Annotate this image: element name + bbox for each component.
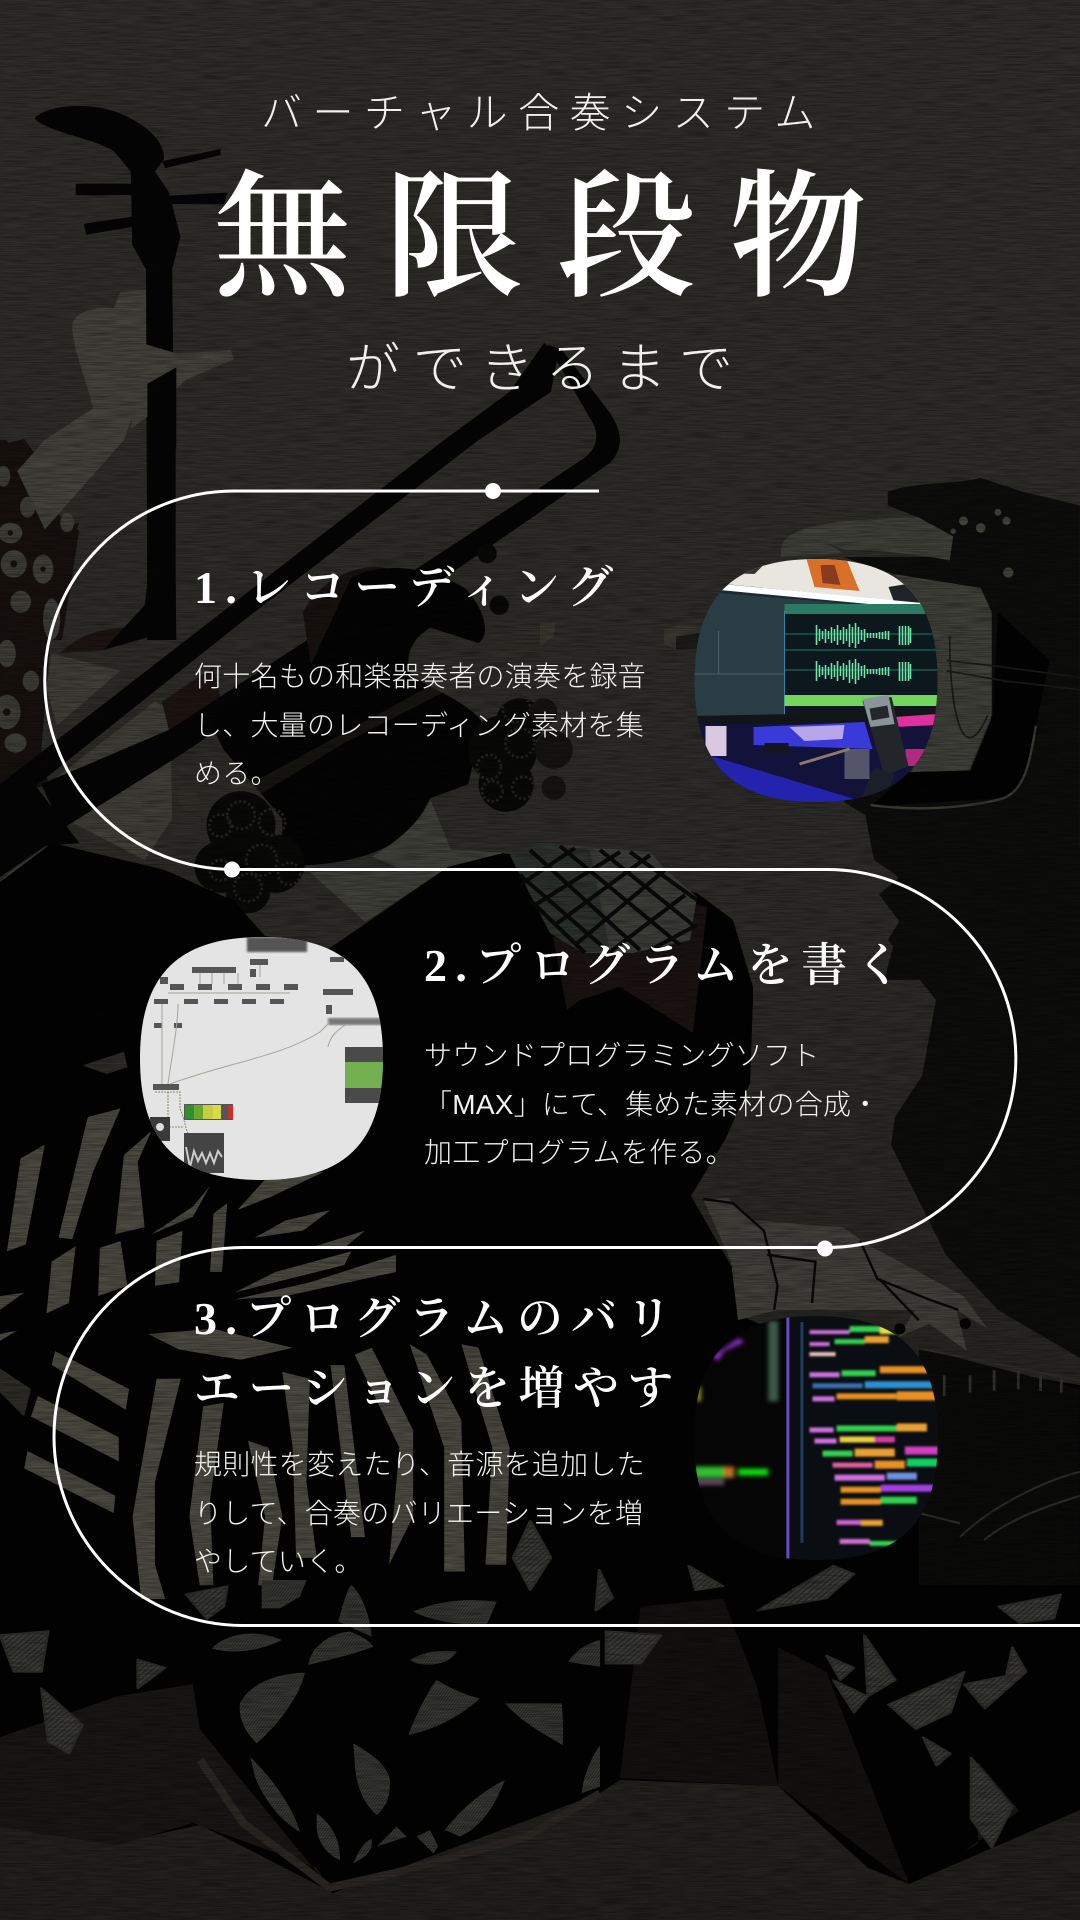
hair and ornaments (179, 544, 544, 922)
body step 3: 規則性を変えたり、音源を追加した (194, 1449, 645, 1480)
panel: step 3 add variations (194, 1293, 682, 1577)
image: DAW monitor and microphone (694, 559, 938, 802)
butterflies on kimono, right and far left (0, 1521, 1061, 1847)
body step 1: 何十名もの和楽器奏者の演奏を録音 (194, 661, 646, 692)
kimono black mass (0, 843, 1080, 1893)
body step 3: やしていく。 (194, 1546, 363, 1577)
body step 1: める。 (194, 758, 279, 789)
body step 2: 「MAX」にて、集めた素材の合成・ (424, 1089, 880, 1120)
heading step 3 (194, 1293, 682, 1414)
heading step 2: 2.プログラムを書く (424, 940, 910, 991)
main title: 無限段物 (213, 162, 901, 315)
hand on strings (704, 1198, 988, 1351)
shamisen, arm and sleeve (0, 106, 620, 640)
panel: step 2 write program (424, 940, 910, 1168)
body step 2 (424, 1040, 880, 1168)
right musician sleeve and hair (530, 478, 1080, 980)
title block (213, 90, 901, 399)
body step 2: 加工プログラムを作る。 (424, 1137, 734, 1168)
body step 3: りして、合奏のバリエーションを増 (194, 1498, 643, 1529)
koto (915, 1348, 1080, 1585)
collar lattice (510, 843, 707, 1033)
image: MAX patch screenshot (140, 937, 383, 1180)
body step 1: し、大量のレコーディング素材を集 (194, 710, 644, 741)
hem fabric (0, 1598, 1019, 1884)
heading step 3: エーションを増やす (194, 1363, 682, 1414)
heading step 3: 3.プログラムのバリ (194, 1293, 680, 1344)
body step 3 (194, 1449, 645, 1577)
panel: step 1 recording (194, 562, 646, 789)
heading step 1: 1.レコーディング (194, 562, 622, 613)
butterflies on kimono, centre (200, 1580, 600, 1888)
right musician lower dark robe (880, 850, 1080, 1358)
left sleeve and bachi panel (0, 440, 540, 881)
subtitle bottom: ができるまで (346, 339, 746, 399)
subtitle top: バーチャル合奏システム (261, 90, 826, 136)
image: code editor close-up (696, 1316, 938, 1560)
body step 1 (194, 661, 646, 789)
body step 2: サウンドプログラミングソフト (424, 1040, 820, 1071)
striped sleeve (0, 1052, 510, 1599)
